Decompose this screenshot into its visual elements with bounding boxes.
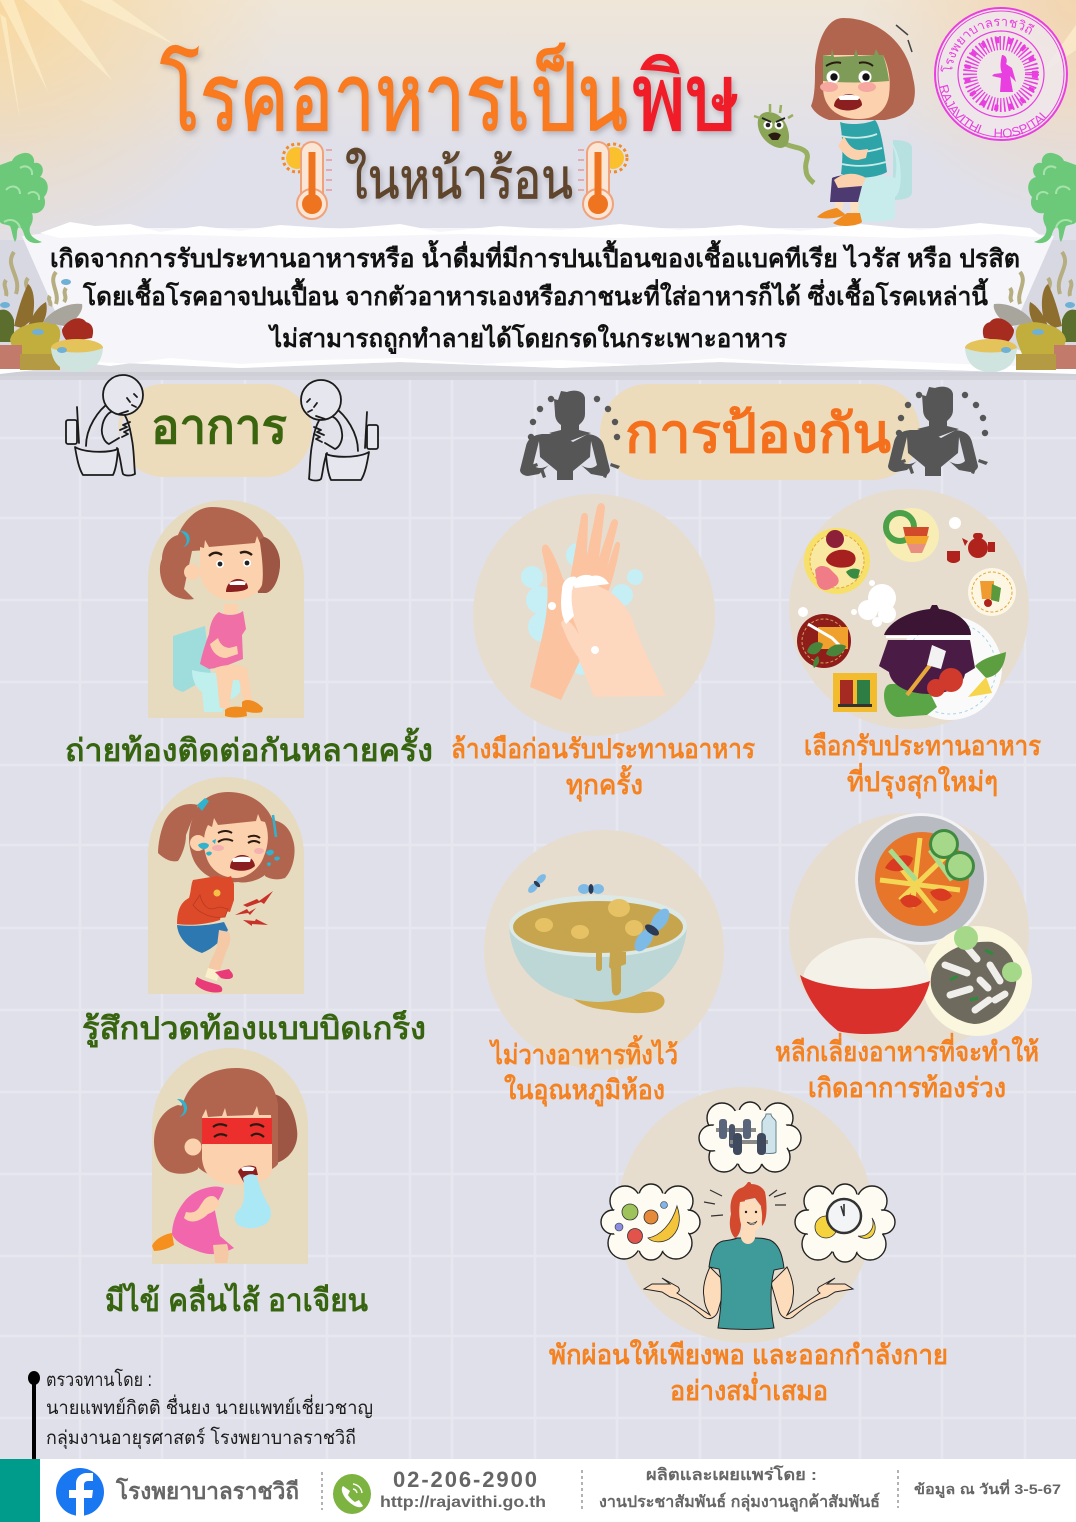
panel: symptom diarrhea <box>148 500 304 718</box>
circle backdrop <box>484 830 724 1070</box>
icon: right stink cloud <box>1028 153 1076 243</box>
icon: sick girl on toilet <box>811 18 915 226</box>
circle backdrop <box>617 1087 873 1343</box>
icon: right thermometer <box>578 142 627 219</box>
intro text: เกิดจากการรับประทานอาหารหรือ น้ำดื่มที่มีการปนเปื้อนของเชื้อแบคทีเรีย ไวรัส หรือ ปรสิต <box>50 239 1020 273</box>
panel: symptom stomach cramps <box>148 777 304 994</box>
data date: ข้อมูล ณ วันที่ 3-5-67 <box>914 1479 1061 1498</box>
label: avoid diarrhea foods <box>775 1032 1039 1103</box>
illustration: woman with thought bubbles <box>601 1102 895 1330</box>
panel: fresh food <box>789 489 1029 729</box>
title: พิษ <box>632 45 740 150</box>
producer credit: ผลิตและเผยแพร่โดย : <box>646 1464 817 1484</box>
illustration: somtam plate, rice and seafood <box>800 813 1032 1036</box>
icon: person on toilet left <box>66 375 143 476</box>
intro text <box>50 239 1020 355</box>
icon: hospital logo: HOSPITAL <box>994 112 1050 138</box>
circle backdrop <box>789 489 1029 729</box>
panel: torn paper introduction band <box>0 222 1076 380</box>
icon: hospital logo: RAJAVITHI <box>940 84 982 134</box>
woman figure <box>644 1182 853 1330</box>
label: wash hands: ล้างมือก่อนรับประทานอาหาร <box>451 734 755 764</box>
icon: left spoiled food pile <box>0 252 103 372</box>
icon: right spoiled food pile <box>965 252 1076 372</box>
heading: prevention: การป้องกัน <box>625 404 891 464</box>
panel: do not leave food out <box>484 830 724 1070</box>
label: do not leave food out: ไม่วางอาหารทิ้งไว้ <box>488 1034 678 1070</box>
thought bubble: sleep <box>795 1184 895 1262</box>
circle backdrop <box>789 813 1029 1053</box>
label: avoid diarrhea foods: เกิดอาการท้องร่วง <box>808 1073 1006 1103</box>
thought bubble: exercise <box>699 1102 801 1173</box>
icon: person on toilet right <box>301 380 378 480</box>
label: fresh food: ที่ปรุงสุกใหม่ๆ <box>847 762 998 799</box>
icon: stomach-ache person right <box>888 387 988 476</box>
label: wash hands <box>451 734 755 802</box>
heading: symptoms: อาการ <box>151 401 287 454</box>
footer bar <box>0 1459 1076 1522</box>
producer credit <box>599 1464 880 1513</box>
label: rest and exercise: พักผ่อนให้เพียงพอ และออกกำลังกาย <box>549 1339 948 1370</box>
label: wash hands: ทุกครั้ง <box>566 764 643 802</box>
illustration: girl on toilet <box>160 507 280 718</box>
heading: prevention <box>600 384 920 480</box>
label: fever: มีไข้ คลื่นไส้ อาเจียน <box>105 1278 368 1318</box>
heading: symptoms <box>118 384 312 477</box>
credit: reviewer: นายแพทย์กิตติ ชื่นยง นายแพทย์เชี่ยวชาญ <box>46 1394 373 1419</box>
icon: facebook <box>56 1468 104 1516</box>
icon: left thermometer <box>283 142 332 219</box>
title: โรคอาหารเป็น <box>160 42 628 150</box>
intro text: ไม่สามารถถูกทำลายได้โดยกรดในกระเพาะอาหาร <box>267 323 788 355</box>
arch 3 <box>152 1048 308 1264</box>
circle backdrop <box>473 494 715 736</box>
contact details: 02-206-2900 <box>393 1467 537 1492</box>
arch 2 <box>148 777 304 994</box>
contact details: http://rajavithi.go.th <box>380 1494 546 1511</box>
label: fresh food <box>804 731 1041 799</box>
illustration: bowl with flies <box>509 872 687 1013</box>
subtitle: ในหน้าร้อน <box>345 147 573 210</box>
illustration: crying girl <box>158 792 295 993</box>
label: do not leave food out <box>488 1034 678 1107</box>
label: diarrhea: ถ่ายท้องติดต่อกันหลายครั้ง <box>65 727 433 768</box>
credit: reviewer <box>28 1368 373 1460</box>
panel: avoid diarrhea foods <box>789 813 1032 1053</box>
icon: phone <box>333 1474 371 1514</box>
arch 1 <box>148 500 304 718</box>
icon: hospital logo: โรงพยาบาลราชวิถี <box>940 18 1035 72</box>
icon: green germ <box>754 104 814 183</box>
illustration: plates and pot <box>797 508 1016 720</box>
facebook page name: โรงพยาบาลราชวิถี <box>115 1477 299 1504</box>
panel: symptom fever and vomiting <box>152 1048 308 1264</box>
illustration: hands with soap <box>521 503 666 700</box>
label: do not leave food out: ในอุณหภูมิห้อง <box>504 1074 665 1107</box>
illustration: vomiting girl <box>152 1068 297 1263</box>
label: rest and exercise <box>549 1339 948 1406</box>
panel: rest and exercise <box>601 1087 895 1343</box>
label: rest and exercise: อย่างสม่ำเสมอ <box>670 1371 828 1406</box>
producer credit: งานประชาสัมพันธ์ กลุ่มงานลูกค้าสัมพันธ์ <box>599 1492 880 1513</box>
icon: hospital logo <box>934 7 1068 141</box>
icon: left stink cloud <box>0 153 48 243</box>
thought bubble: nutrition <box>601 1184 700 1260</box>
credit: reviewer: กลุ่มงานอายุรศาสตร์ โรงพยาบาลราชวิถี <box>46 1426 356 1450</box>
label: fresh food: เลือกรับประทานอาหาร <box>804 731 1041 761</box>
icon: stomach-ache person left <box>520 391 620 480</box>
panel: wash hands <box>473 494 715 736</box>
credit: reviewer: ตรวจทานโดย : <box>46 1368 152 1391</box>
label: avoid diarrhea foods: หลีกเลี่ยงอาหารที่จะทำให้ <box>775 1032 1039 1067</box>
intro text: โดยเชื้อโรคอาจปนเปื้อน จากตัวอาหารเองหรือภาชนะที่ใส่อาหารก็ได้ ซึ่งเชื้อโรคเหล่านี้ <box>82 277 989 311</box>
label: cramps: รู้สึกปวดท้องแบบบิดเกร็ง <box>82 1009 426 1048</box>
contact details <box>380 1467 546 1511</box>
